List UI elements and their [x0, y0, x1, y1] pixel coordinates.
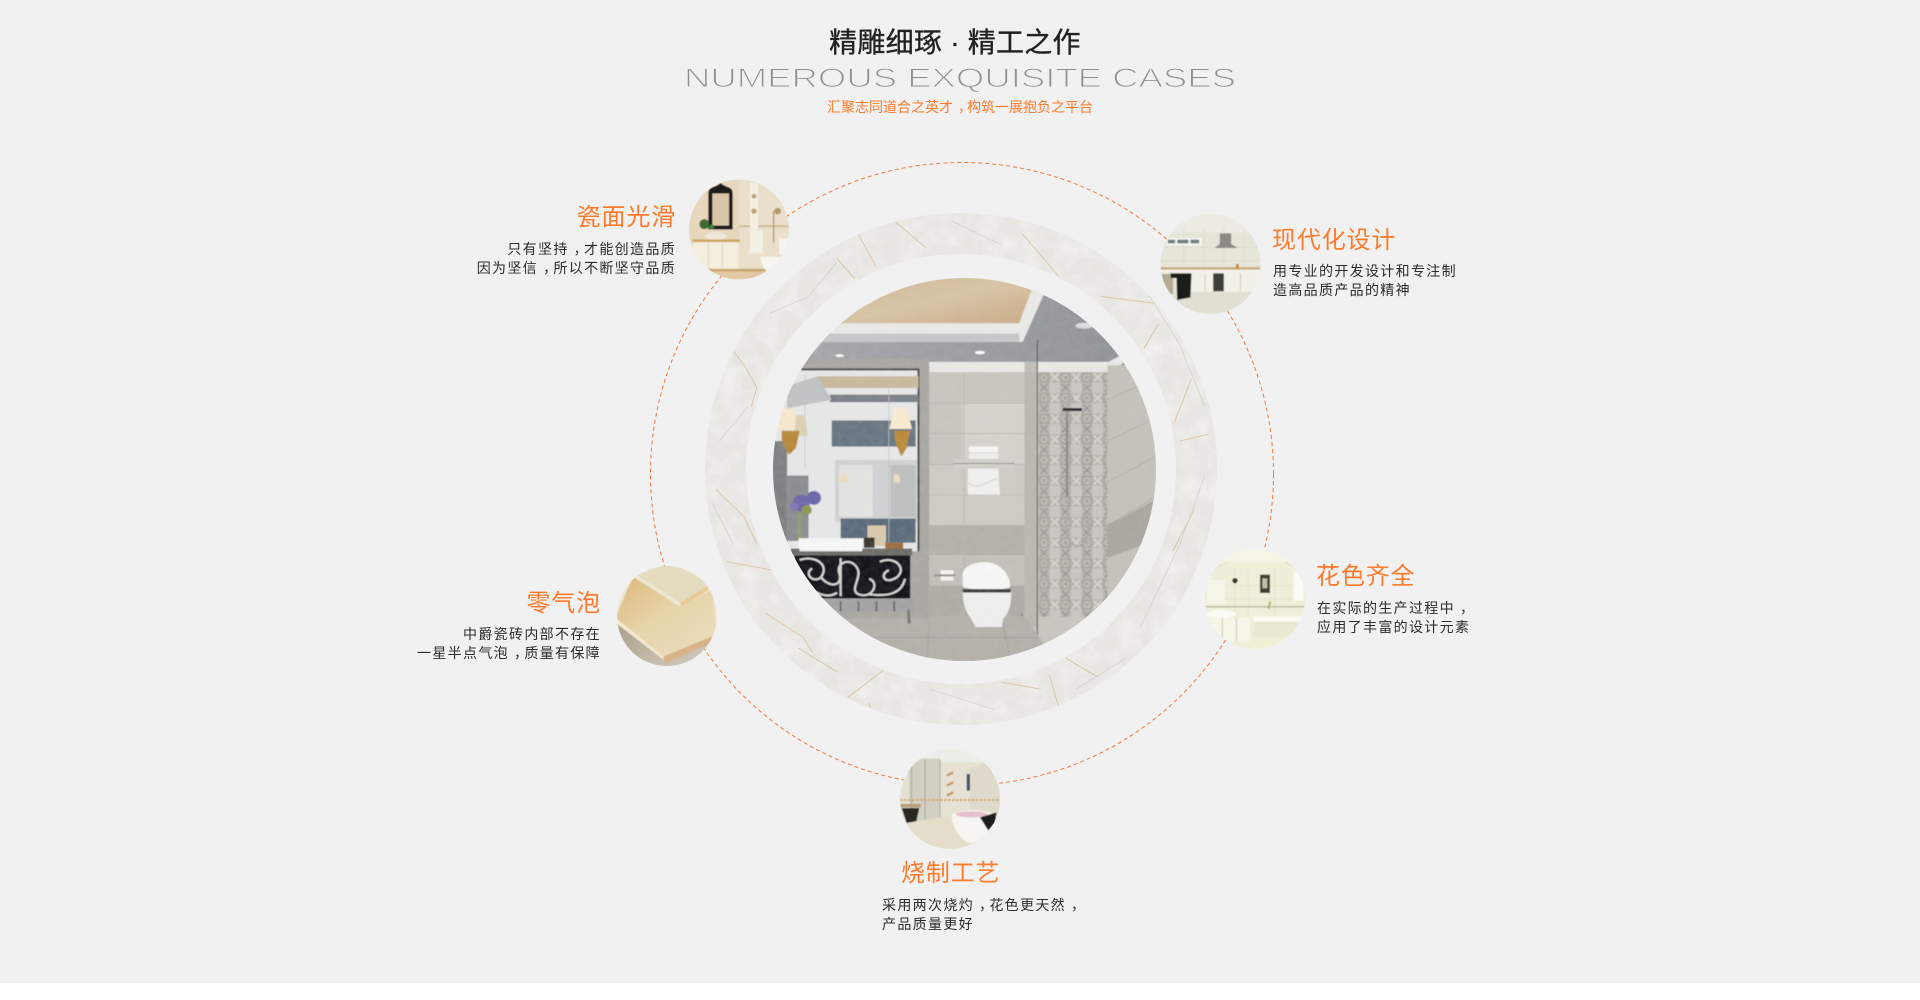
heading: 零气泡: [526, 590, 601, 617]
shower set: [1063, 395, 1089, 546]
illustration layer: [617, 162, 1305, 849]
marble ring: [705, 213, 1217, 725]
feature: full color range: [1316, 563, 1475, 635]
description: 一星半点气泡 ，质量有保障: [417, 645, 601, 661]
description: 采用两次烧灼 ，花色更天然 ，: [882, 897, 1086, 913]
description: 产品质量更好: [882, 916, 974, 932]
thumbnail: firing craft bathroom: [900, 749, 1000, 849]
feature: smooth porcelain: [477, 204, 676, 276]
central bathroom photo: [769, 269, 1164, 668]
orange tagline: 汇聚志同道合之英才 ，构筑一展抱负之平台: [827, 99, 1093, 115]
description: 用专业的开发设计和专注制: [1273, 263, 1457, 279]
ceiling: [794, 278, 1126, 644]
heading: 花色齐全: [1316, 563, 1415, 590]
thumbnail: smooth porcelain bathroom: [689, 180, 789, 279]
floor: [844, 616, 1044, 661]
description: [1273, 263, 1457, 298]
description: [1317, 600, 1475, 635]
description: 因为坚信 ，所以不断坚守品质: [477, 260, 676, 276]
vanity cabinet: [794, 555, 914, 624]
wall tiles: [928, 372, 1025, 617]
feature: modern design: [1272, 227, 1457, 298]
description: 中爵瓷砖内部不存在: [463, 626, 601, 642]
description: 只有坚持 ，才能创造品质: [507, 241, 676, 257]
feature: no bubbles: [417, 590, 601, 661]
heading: 现代化设计: [1272, 227, 1396, 254]
flowers: [790, 491, 821, 539]
toilet paper holder: [934, 570, 956, 581]
towel rack: [953, 446, 1015, 495]
description: 造高品质产品的精神: [1273, 282, 1411, 298]
thumbnail: tile edge, no bubbles: [617, 566, 717, 666]
glass panel: [1021, 339, 1041, 644]
feature: firing craft: [882, 860, 1086, 932]
description: [882, 897, 1086, 932]
wall lamps: [777, 408, 912, 482]
heading: 烧制工艺: [901, 860, 1000, 887]
right wall: [1107, 365, 1156, 559]
thumbnail: full color range bathroom: [1205, 549, 1305, 649]
description: [477, 241, 676, 276]
mirror frame and reflection: [769, 359, 929, 618]
sink and vanity top: [791, 525, 912, 555]
description: [417, 626, 601, 661]
description: 在实际的生产过程中 ，: [1317, 600, 1475, 616]
dashed orbit circle: [650, 162, 1274, 786]
description: 应用了丰富的设计元素: [1317, 619, 1470, 635]
toilet: [962, 562, 1011, 627]
title: 精雕细琢 · 精工之作: [829, 27, 1081, 58]
crown moulding: [928, 354, 1123, 372]
patterned shower column: [1039, 372, 1107, 617]
thumbnail: modern kitchen: [1160, 214, 1260, 314]
heading: 瓷面光滑: [577, 204, 676, 231]
